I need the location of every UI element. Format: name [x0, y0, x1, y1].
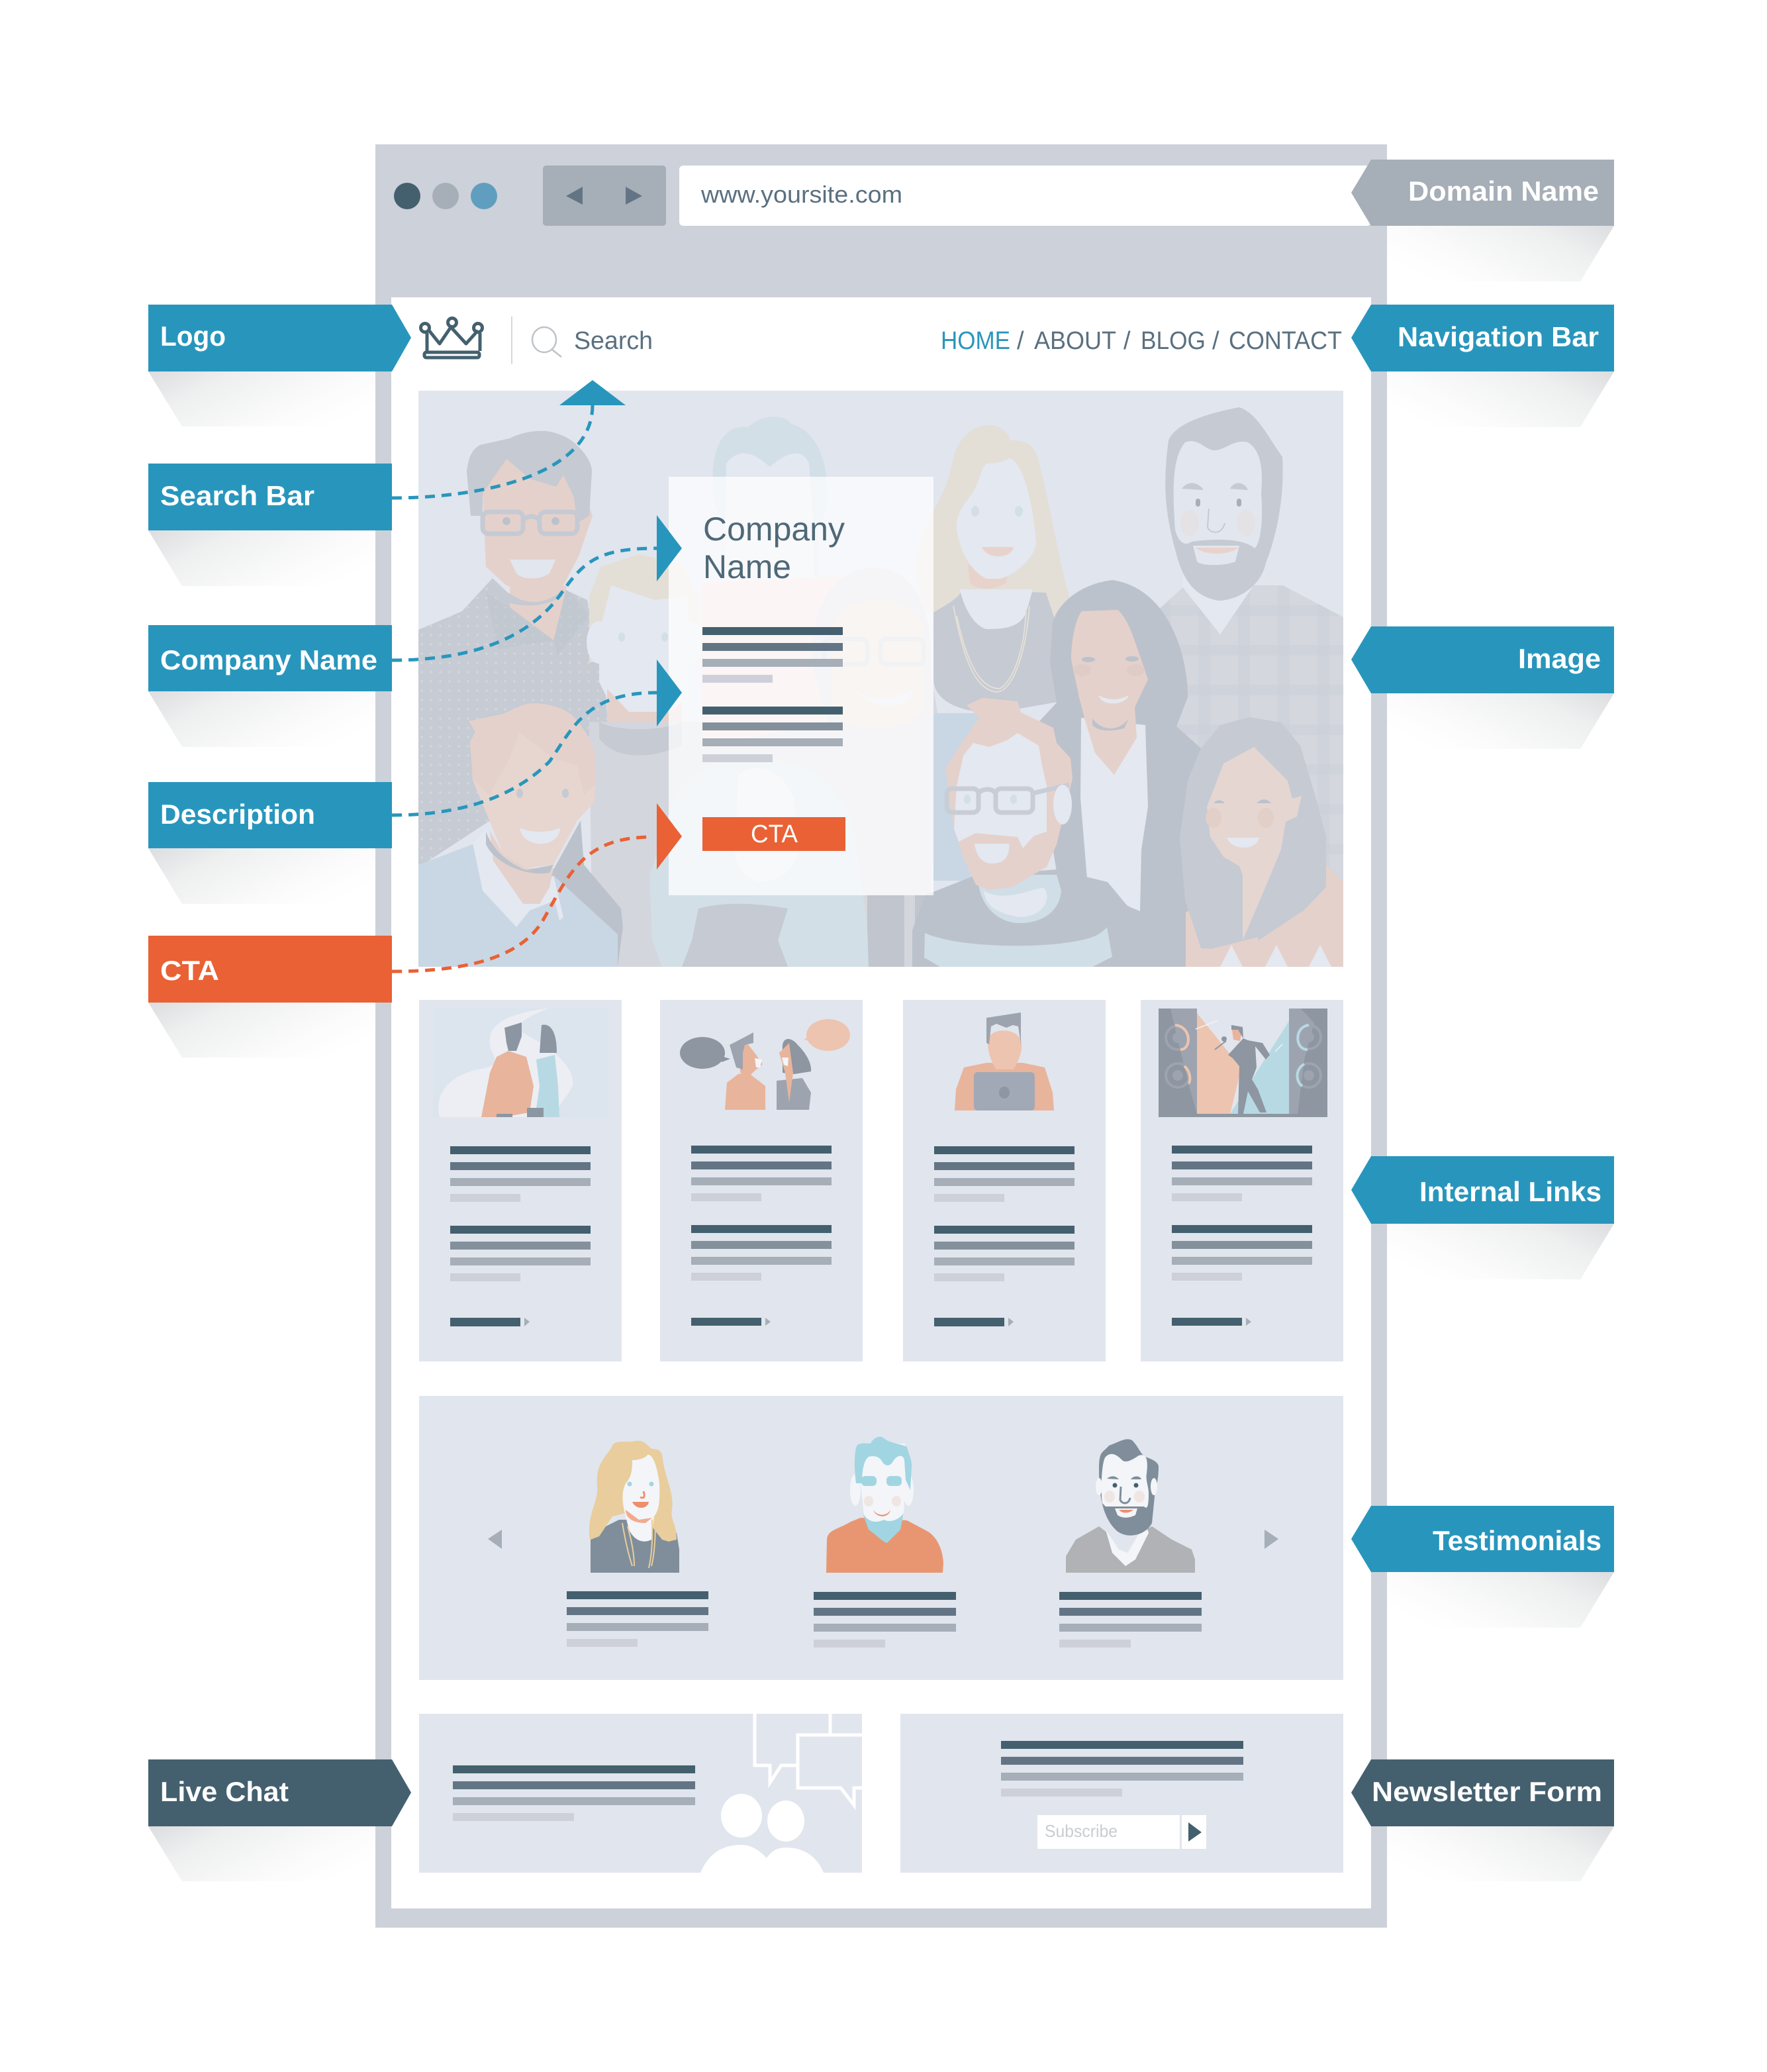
- person: woman with long hair: [1180, 717, 1343, 967]
- subscribe field: Subscribe: [1045, 1821, 1118, 1841]
- tag: logo: Logo: [160, 321, 226, 352]
- tag: navigation bar: Navigation Bar: [1398, 321, 1599, 352]
- CTA button: CTA: [751, 820, 798, 848]
- search text: Search: [574, 327, 653, 355]
- tag: CTA: CTA: [160, 955, 219, 986]
- navigation links: /: [1123, 327, 1131, 355]
- avatar: bearded man: [1066, 1439, 1195, 1573]
- person: bearded man with glasses: [912, 698, 1131, 967]
- tag: newsletter form: Newsletter Form: [1372, 1776, 1602, 1807]
- person: man in blue sweater: [418, 703, 623, 967]
- tag: search bar: [148, 464, 392, 530]
- back and forward buttons: [543, 166, 666, 226]
- description lines: [702, 627, 843, 762]
- text lines: [1172, 1146, 1312, 1326]
- person: blonde woman: [933, 425, 1069, 711]
- card 4: [1141, 1000, 1343, 1361]
- icon: chat bubbles: [755, 1708, 867, 1805]
- avatar: man with blue hair: [826, 1437, 943, 1573]
- tag: description: Description: [160, 799, 315, 830]
- person: man in dotted shirt: [418, 431, 608, 867]
- tag: logo: [148, 305, 411, 371]
- tag: company name: [148, 625, 392, 691]
- card 3: [903, 1000, 1106, 1361]
- text lines: [453, 1765, 695, 1821]
- carousel arrows: [488, 1530, 1278, 1549]
- browser frame: [375, 144, 1387, 1928]
- tag: internal links: Internal Links: [1419, 1176, 1601, 1207]
- card 2: [660, 1000, 863, 1361]
- text lines: [934, 1146, 1075, 1326]
- panel: internal links: [419, 1000, 1343, 1361]
- navigation links: ABOUT: [1034, 327, 1116, 355]
- text lines: [691, 1146, 832, 1326]
- subscribe field: [1037, 1815, 1180, 1849]
- icon: people: [700, 1794, 824, 1873]
- illustration: conversation: [680, 1019, 850, 1110]
- tag shadows: [148, 226, 1614, 1881]
- person: woman with dark hair: [1039, 580, 1201, 927]
- person: woman with light blue hair: [649, 814, 925, 967]
- text lines: [1001, 1741, 1243, 1797]
- illustration: singer and speakers: [1159, 1009, 1327, 1117]
- tag: domain name: [1351, 160, 1614, 226]
- icon: crown logo: [421, 318, 482, 358]
- page area: [391, 297, 1371, 1908]
- card 1: [419, 1000, 622, 1361]
- domain text: www.yoursite.com: [700, 181, 902, 208]
- hero image: [418, 391, 1343, 967]
- browser window: [375, 144, 1387, 1928]
- tag: company name: Company Name: [160, 644, 377, 675]
- heading: company name: Company: [703, 511, 845, 548]
- person: man with glasses behind panel: [822, 637, 937, 926]
- navigation links: CONTACT: [1229, 327, 1342, 355]
- person: blue-haired man: [712, 417, 826, 477]
- address bar: [679, 166, 1371, 226]
- text lines: [450, 1146, 591, 1326]
- navigation links: BLOG: [1141, 327, 1206, 355]
- tag: internal links: [1351, 1156, 1614, 1224]
- tag: newsletter form: [1351, 1759, 1614, 1826]
- tag: CTA: [148, 936, 392, 1003]
- connector: search bar: [392, 380, 626, 498]
- navigation links: /: [1017, 327, 1024, 355]
- panel: testimonials: [419, 1396, 1343, 1680]
- testimonial text lines: [567, 1591, 1202, 1648]
- tag: search bar: Search Bar: [160, 480, 314, 511]
- heading: company name: Name: [703, 548, 791, 585]
- tag: image: Image: [1518, 643, 1601, 674]
- connector: description: [392, 660, 682, 815]
- tag: testimonials: Testimonials: [1433, 1525, 1601, 1556]
- panel: live chat: [419, 1708, 867, 1873]
- navigation links: HOME: [941, 327, 1010, 355]
- CTA button: [702, 817, 845, 851]
- navigation links: /: [1212, 327, 1219, 355]
- tag: live chat: [148, 1759, 411, 1826]
- tag: testimonials: [1351, 1506, 1614, 1572]
- navigation links: [941, 327, 1342, 355]
- tag: live chat: Live Chat: [160, 1776, 289, 1807]
- heading: company name: [703, 511, 845, 585]
- connector: company name: [392, 515, 682, 660]
- illustration: couple: [433, 1008, 608, 1117]
- connector: CTA: [392, 803, 682, 971]
- person: bearded man in plaid: [1160, 407, 1343, 882]
- panel: newsletter form: [900, 1714, 1343, 1873]
- illustration: man with laptop: [955, 1012, 1054, 1110]
- tag: image: [1351, 626, 1614, 693]
- window control dots: [394, 183, 497, 209]
- white text panel: [669, 477, 933, 895]
- tag: description: [148, 782, 392, 848]
- avatar: blonde woman: [589, 1441, 679, 1573]
- tag: navigation bar: [1351, 305, 1614, 371]
- subscribe button: [1182, 1815, 1206, 1849]
- person: blonde man: [587, 554, 682, 967]
- tag: domain name: Domain Name: [1408, 175, 1599, 207]
- header: logo, search, navigation: [421, 318, 1342, 358]
- search icon: [532, 327, 561, 357]
